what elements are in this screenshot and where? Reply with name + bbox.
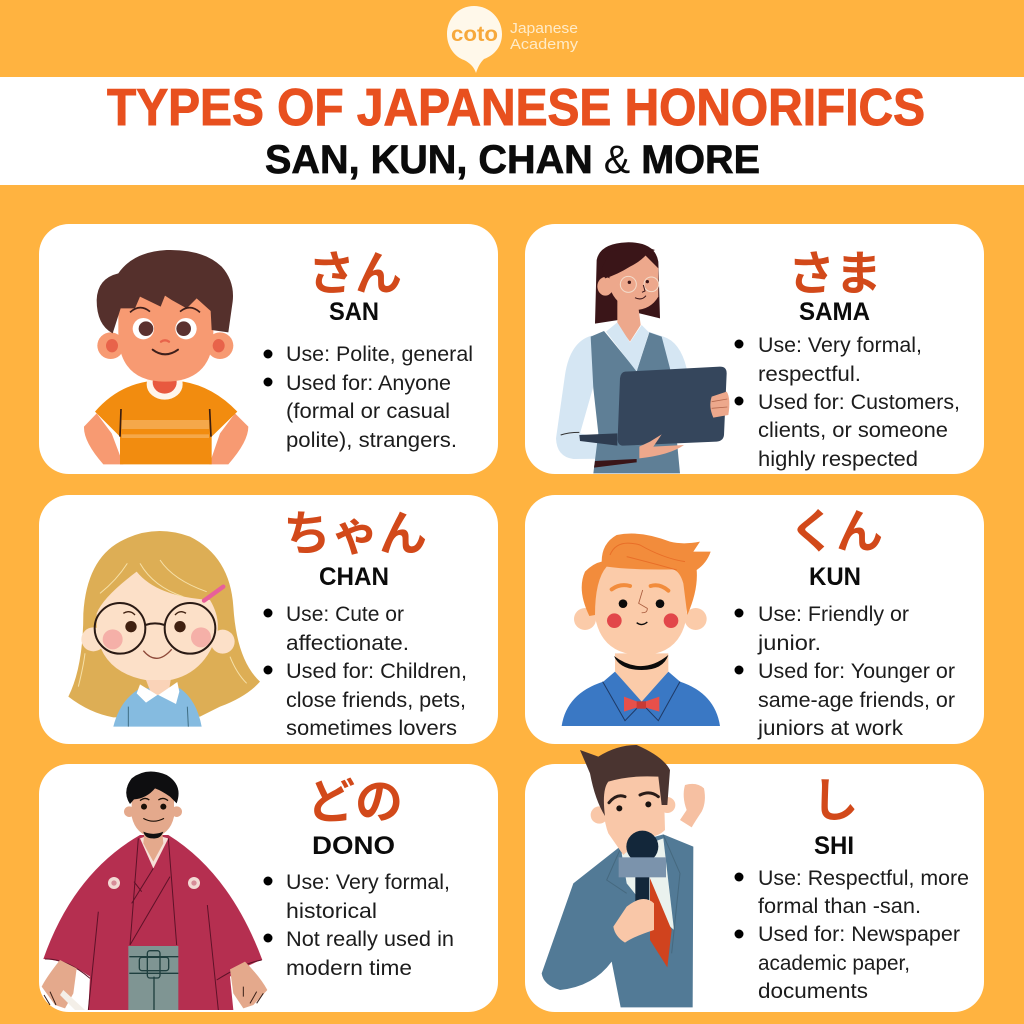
heading: dono kana: どの — [307, 776, 403, 829]
panel: chan — [39, 495, 498, 744]
text block: dono details: historical — [286, 899, 377, 923]
heading: dono romaji: DONO — [312, 832, 395, 860]
heading: shi kana: し — [812, 774, 858, 827]
icon: man in kimono — [42, 772, 267, 1010]
header band — [0, 77, 1024, 185]
text block: san details: Used for: Anyone — [286, 371, 451, 395]
heading: kun romaji: KUN — [809, 563, 861, 591]
text block: san details: polite), strangers. — [286, 428, 457, 452]
heading: san romaji: SAN — [329, 298, 379, 326]
panel: dono — [39, 764, 498, 1012]
text block: sama details: Use: Very formal, — [758, 333, 922, 357]
text block: dono details: Not really used in — [286, 927, 454, 951]
text block: shi details: documents — [758, 979, 868, 1003]
text block: shi details: Used for: Newspaper — [758, 922, 960, 946]
text block: kun details: same-age friends, or — [758, 688, 955, 712]
text block: chan details: close friends, pets, — [286, 688, 466, 712]
icon: girl with glasses — [68, 531, 260, 727]
logo: coto Japanese Academy: Japanese — [510, 21, 578, 37]
panel: san — [39, 224, 498, 474]
text block: shi details: academic paper, — [758, 951, 910, 975]
text block: san details — [264, 342, 473, 452]
text block: chan details: sometimes lovers — [286, 716, 457, 740]
subtitle: SAN, KUN, CHAN & MORE — [265, 138, 760, 182]
text block: sama details: clients, or someone — [758, 418, 948, 442]
text block: kun details: juniors at work — [757, 716, 903, 740]
panel: shi — [525, 745, 984, 1012]
text block: kun details — [734, 602, 955, 740]
heading: chan kana: ちゃん — [283, 508, 427, 561]
text block: sama details: Used for: Customers, — [758, 390, 960, 414]
title: TYPES OF JAPANESE HONORIFICS — [107, 79, 925, 137]
text block: sama details: respectful. — [758, 362, 861, 386]
text block: chan details — [264, 602, 467, 740]
text block: kun details: junior. — [757, 631, 821, 655]
icon: boy with bow tie — [562, 533, 720, 726]
text block: shi details: formal than -san. — [758, 894, 921, 918]
heading: shi romaji: SHI — [814, 832, 854, 860]
heading: kun kana: くん — [789, 505, 883, 558]
text block: dono details — [264, 870, 454, 980]
logo: coto Japanese Academy: coto — [451, 23, 498, 46]
text block: san details: (formal or casual — [286, 399, 450, 423]
heading: sama romaji: SAMA — [799, 298, 870, 326]
icon: boy — [84, 250, 248, 464]
text block: chan details: affectionate. — [286, 631, 409, 655]
text block: sama details — [734, 333, 960, 471]
heading: chan romaji: CHAN — [319, 563, 389, 591]
icon: woman with laptop — [556, 242, 729, 473]
text block: chan details: Use: Cute or — [286, 602, 404, 626]
text block: shi details — [734, 866, 969, 1003]
text block: kun details: Used for: Younger or — [758, 659, 955, 683]
text block: dono details: modern time — [286, 956, 412, 980]
icon: man with microphone — [542, 745, 705, 1007]
panel: kun — [525, 495, 984, 744]
panel: sama — [525, 224, 984, 474]
text block: chan details: Used for: Children, — [286, 659, 467, 683]
logo: coto Japanese Academy: Academy — [510, 37, 579, 53]
text block: kun details: Use: Friendly or — [758, 602, 909, 626]
heading: san kana: さん — [308, 247, 402, 300]
text block: dono details: Use: Very formal, — [286, 870, 450, 894]
text block: sama details: highly respected — [758, 447, 918, 471]
text block: shi details: Use: Respectful, more — [758, 866, 969, 890]
logo: coto Japanese Academy — [447, 6, 579, 73]
heading: sama kana: さま — [788, 247, 882, 300]
text block: san details: Use: Polite, general — [286, 342, 473, 366]
